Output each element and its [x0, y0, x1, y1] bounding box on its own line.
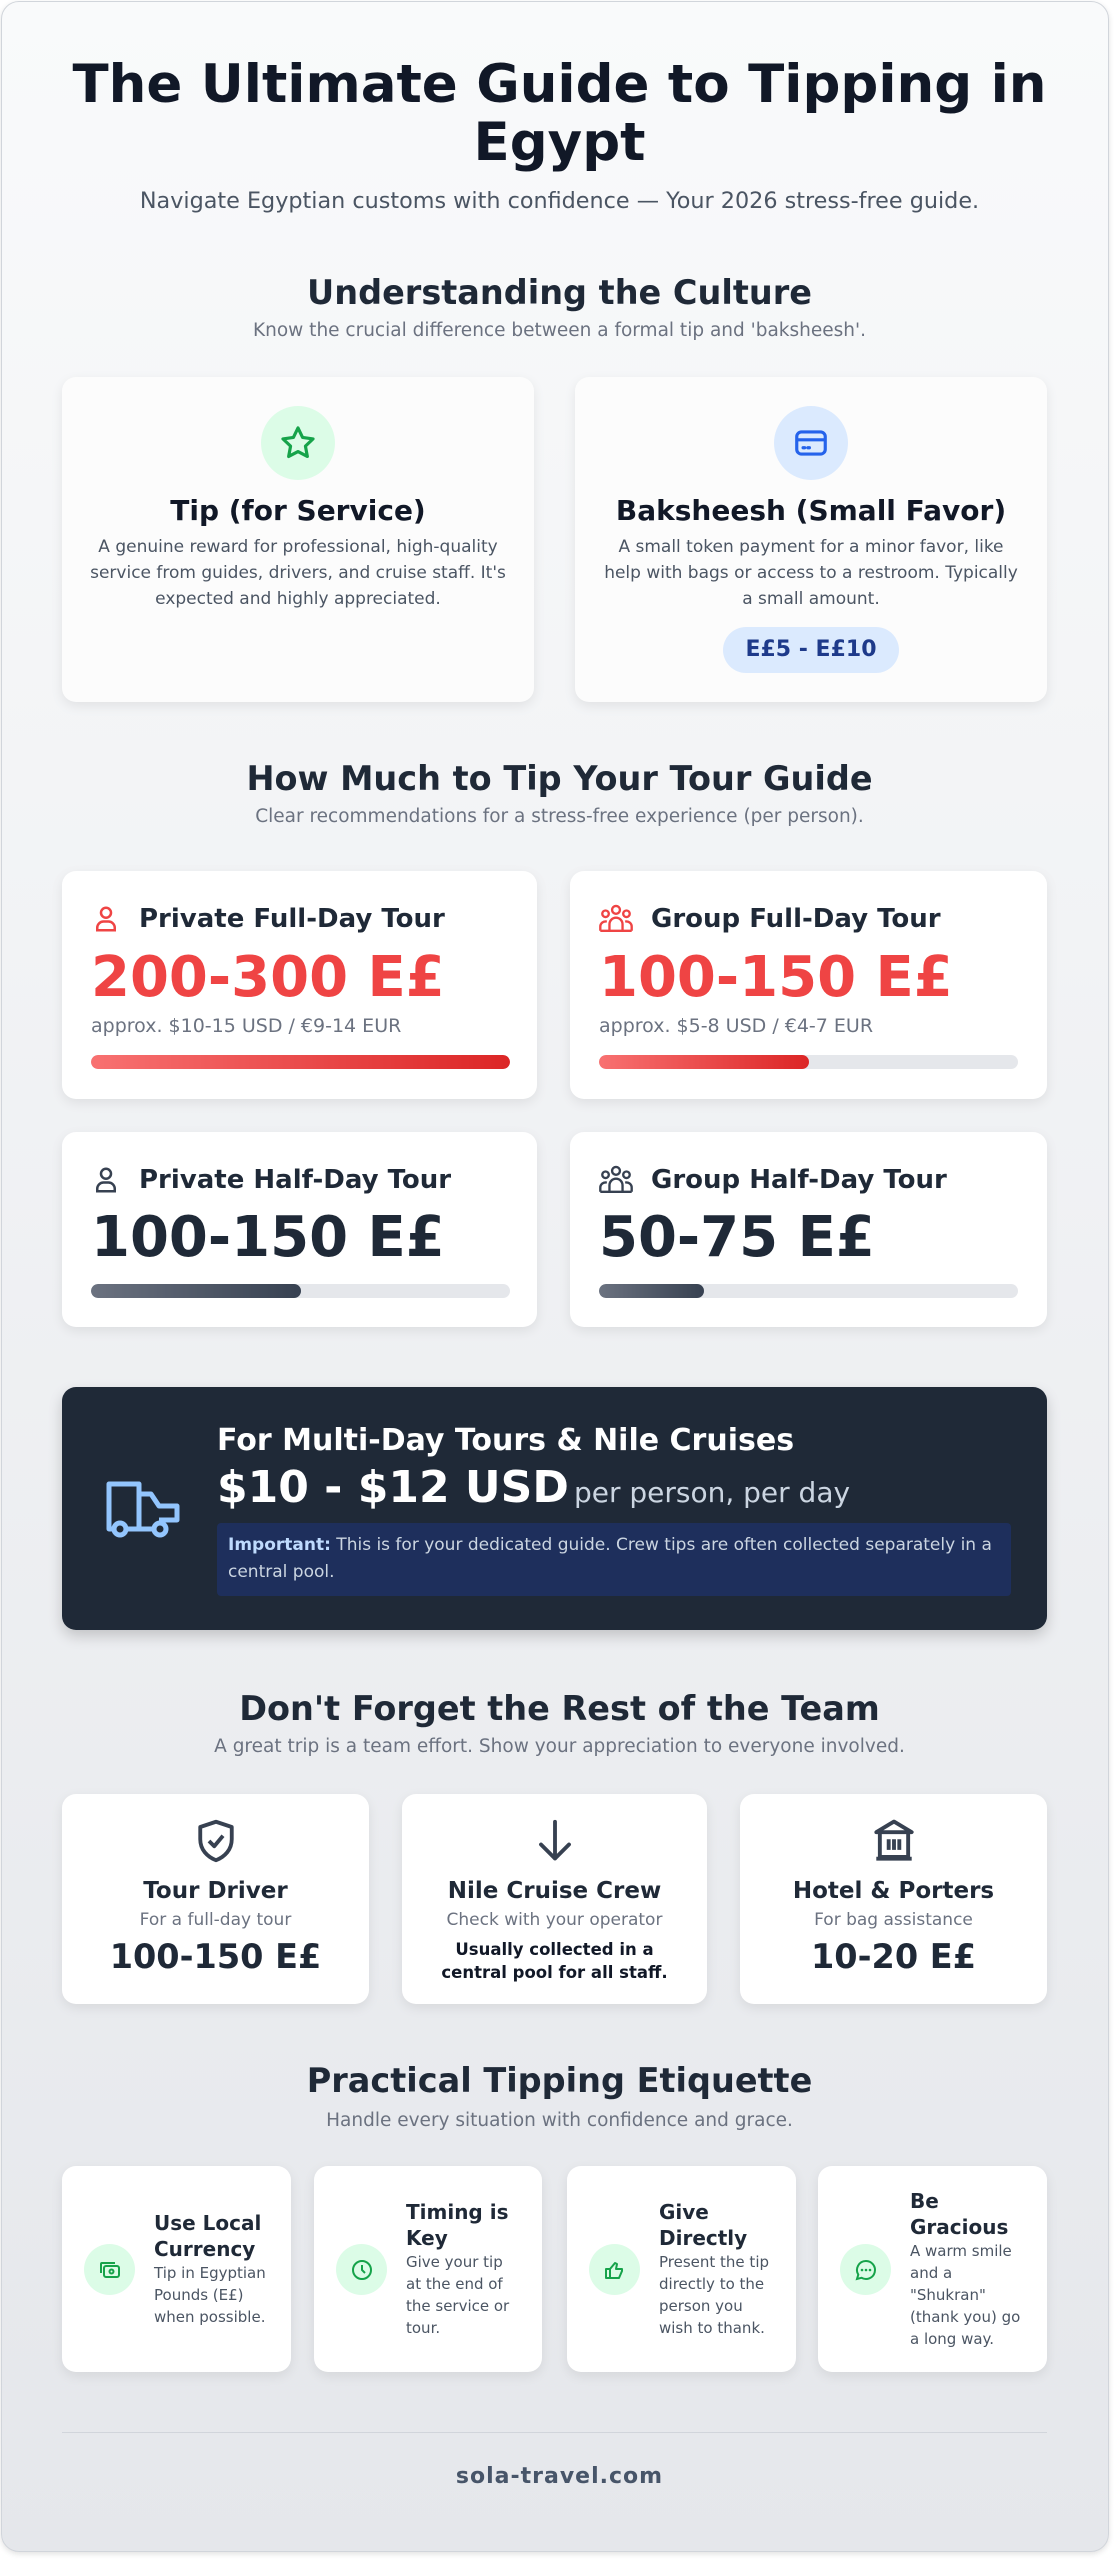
text: approx: approx. $5-8 USD / €4-7 EUR [599, 1015, 873, 1037]
panel: be gracious [818, 2166, 1047, 2372]
bar [599, 1284, 1018, 1298]
bar [91, 1055, 510, 1069]
icon: money [84, 2244, 135, 2295]
icon: truck [106, 1482, 180, 1538]
text: Be Gracious [910, 2189, 1008, 2239]
panel: give directly [567, 2166, 796, 2372]
heading: multi-day: For Multi-Day Tours & Nile Cruises [217, 1423, 794, 1458]
note: Usually collected in a central pool for all staff. [441, 1940, 668, 1982]
panel: group full-day [570, 871, 1047, 1099]
panel: multi-day callout [62, 1387, 1047, 1630]
heading: baksheesh: Baksheesh (Small Favor) [616, 494, 1006, 527]
subheading: culture: Know the crucial difference between a formal tip and 'baksheesh'. [253, 320, 866, 341]
text: Give your tip at the end of the service or tour. [406, 2253, 509, 2337]
subheading: tour guide: Clear recommendations for a stress-free experience (per person). [255, 806, 864, 827]
price: 10-20 E£ [811, 1937, 976, 1976]
title: Nile Cruise Crew [448, 1878, 661, 1904]
title: group full-day: Group Full-Day Tour [651, 904, 941, 934]
text [406, 2200, 510, 2337]
icon: chat [840, 2244, 891, 2295]
subheading: team: A great trip is a team effort. Show your appreciation to everyone involved. [214, 1736, 905, 1757]
text: Present the tip directly to the person you wish to thank. [659, 2253, 769, 2337]
bar [91, 1284, 510, 1298]
note: important: Important: This is for your dedicated guide. Crew tips are often collected separately in a central pool. [228, 1535, 992, 1582]
panel: use local currency [62, 2166, 291, 2372]
text: Timing is Key [406, 2200, 508, 2250]
text: approx: approx. $10-15 USD / €9-14 EUR [91, 1015, 401, 1037]
icon: shield [198, 1820, 234, 1862]
heading: tour guide: How Much to Tip Your Tour Guide [246, 759, 873, 798]
panel: tour driver [62, 1794, 369, 2004]
text: Use Local Currency [154, 2211, 261, 2261]
icon: building [874, 1820, 914, 1861]
text: tip description: A genuine reward for professional, high-quality service from guides, drivers, and cruise staff. It's expected and highly appreciated. [90, 537, 506, 609]
price: 100-150 E£ [110, 1937, 321, 1976]
panel: private full-day [62, 871, 537, 1099]
text [154, 2211, 266, 2326]
title: private full-day: Private Full-Day Tour [139, 904, 445, 934]
title: Hotel & Porters [793, 1878, 994, 1904]
subtitle: Navigate Egyptian customs with confidence — Your 2026 stress-free guide. [140, 188, 979, 214]
note: important [217, 1523, 1011, 1596]
heading: tip: Tip (for Service) [170, 494, 426, 527]
heading: etiquette: Practical Tipping Etiquette [307, 2061, 812, 2100]
price: 200-300 E£ [91, 945, 445, 1010]
subtitle: For bag assistance [814, 1910, 973, 1930]
icon: hand [589, 2244, 640, 2295]
icon: arrow down [539, 1820, 571, 1860]
panel: tip for service [62, 377, 534, 702]
price: 50-75 E£ [599, 1205, 875, 1270]
panel: private half-day [62, 1132, 537, 1327]
text [910, 2189, 1020, 2348]
title: group half-day: Group Half-Day Tour [651, 1165, 947, 1195]
bar [599, 1055, 1018, 1069]
panel: baksheesh [575, 377, 1047, 702]
panel: nile cruise crew [402, 1794, 707, 2004]
title: Tour Driver [143, 1878, 288, 1904]
icon: star [261, 406, 335, 480]
text: baksheesh description: A small token payment for a minor favor, like help with bags or access to a restroom. Typically a small amount. [604, 537, 1018, 609]
text: A warm smile and a "Shukran" (thank you) go a long way. [910, 2242, 1020, 2348]
pill: amount: E£5 - E£10 [745, 637, 877, 662]
text: Give Directly [659, 2200, 747, 2250]
price: 100-150 E£ [91, 1205, 445, 1270]
subtitle: For a full-day tour [140, 1910, 291, 1930]
price: 100-150 E£ [599, 945, 953, 1010]
heading: culture: Understanding the Culture [307, 273, 812, 312]
title: The Ultimate Guide to Tipping in Egypt [72, 54, 1047, 173]
panel: hotel porters [740, 1794, 1047, 2004]
title: private half-day: Private Half-Day Tour [139, 1165, 451, 1195]
panel: timing is key [314, 2166, 542, 2372]
price: multi-day: $10 - $12 USD per person, per day [217, 1462, 850, 1513]
pill: amount [723, 627, 899, 673]
icon: card [774, 406, 848, 480]
heading: team: Don't Forget the Rest of the Team [239, 1689, 880, 1728]
subheading: etiquette: Handle every situation with confidence and grace. [326, 2110, 793, 2131]
panel: group half-day [570, 1132, 1047, 1327]
footer: sola-travel.com [456, 2464, 663, 2489]
subtitle: Check with your operator [447, 1910, 662, 1930]
icon: clock [336, 2244, 387, 2295]
text: Tip in Egyptian Pounds (E£) when possible. [154, 2264, 266, 2326]
text [659, 2200, 769, 2337]
